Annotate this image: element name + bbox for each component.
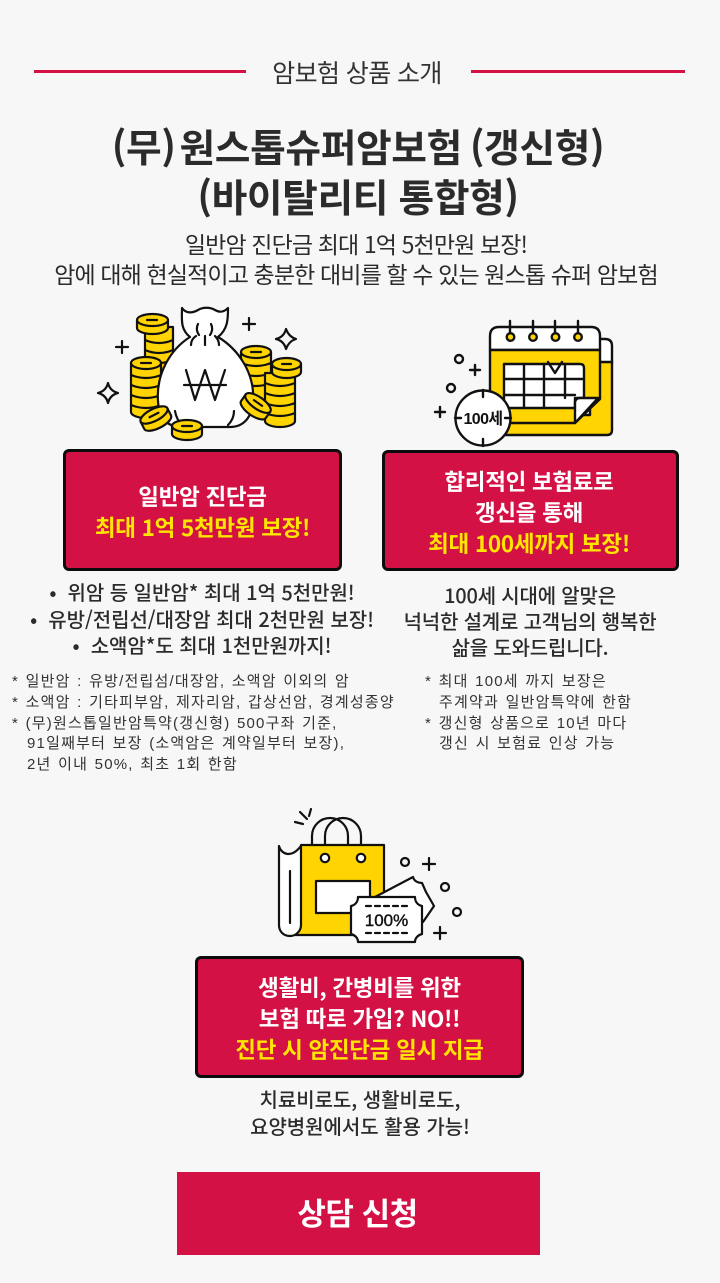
closing text: 요양병원에서도 활용 가능! — [250, 1111, 470, 1140]
title: (무)원스톱슈퍼암보험(갱신형) — [112, 118, 604, 174]
title: (바이탈리티 통합형) — [197, 168, 519, 224]
title — [112, 118, 604, 224]
footnotes left: * (무)원스톱일반암특약(갱신형) 500구좌 기준, — [12, 715, 338, 732]
footnotes left: 91일째부터 보장 (소액암은 계약일부터 보장), — [27, 735, 345, 752]
callout: renewal to age 100: 갱신을 통해 — [475, 496, 583, 528]
icon: calendar with 100 years clock — [434, 320, 614, 448]
coverage list: • 소액암*도 최대 1천만원까지! — [73, 630, 331, 659]
callout: lump sum payment: 생활비, 간병비를 위한 — [258, 971, 461, 1003]
age 100 description: 100세 시대에 알맞은 — [444, 580, 616, 609]
footnotes left — [12, 673, 395, 773]
coverage list — [30, 577, 374, 659]
coverage list: • 위암 등 일반암* 최대 1억 5천만원! — [49, 577, 355, 606]
footnotes right — [425, 673, 632, 752]
age 100 description: 삶을 도와드립니다. — [452, 632, 608, 661]
footnotes right: * 갱신형 상품으로 10년 마다 — [425, 715, 627, 732]
button: consultation request: 상담 신청 — [297, 1189, 418, 1234]
section heading: 암보험 상품 소개 — [272, 54, 442, 90]
closing text — [250, 1084, 470, 1140]
section heading — [34, 54, 685, 90]
subtitle: 암에 대해 현실적이고 충분한 대비를 할 수 있는 원스톱 슈퍼 암보험 — [54, 256, 658, 290]
callout: renewal to age 100 — [382, 450, 679, 571]
footnotes right: 갱신 시 보험료 인상 가능 — [439, 735, 615, 752]
subtitle: 일반암 진단금 최대 1억 5천만원 보장! — [185, 226, 527, 260]
icon: money bag and coins — [96, 306, 302, 442]
footnotes left: * 일반암 : 유방/전립섬/대장암, 소액암 이외의 암 — [12, 673, 350, 690]
callout: lump sum payment: 진단 시 암진단금 일시 지급 — [235, 1033, 484, 1065]
footnotes right: 주계약과 일반암특약에 한함 — [439, 694, 632, 711]
icon: shopping bag and tickets — [278, 808, 462, 944]
age 100 description — [404, 580, 656, 661]
icon: calendar with 100 years clock: 100세 — [463, 410, 503, 428]
footnotes left: * 소액암 : 기타피부암, 제자리암, 갑상선암, 경계성종양 — [12, 694, 395, 711]
coverage list: • 유방/전립선/대장암 최대 2천만원 보장! — [30, 604, 374, 632]
callout: lump sum payment: 보험 따로 가입? NO!! — [259, 1002, 460, 1034]
callout: renewal to age 100: 합리적인 보험료로 — [444, 465, 614, 497]
callout: lump sum payment — [195, 956, 524, 1078]
button: consultation request — [177, 1172, 540, 1255]
age 100 description: 넉넉한 설계로 고객님의 행복한 — [404, 606, 656, 635]
icon: shopping bag and tickets: 100% — [365, 911, 408, 930]
footnotes left: 2년 이내 50%, 최초 1회 한함 — [27, 756, 238, 773]
callout: renewal to age 100: 최대 100세까지 보장! — [428, 527, 630, 559]
callout: general cancer diagnosis: 일반암 진단금 — [138, 480, 267, 512]
callout: general cancer diagnosis: 최대 1억 5천만원 보장! — [95, 511, 310, 543]
subtitle — [54, 226, 658, 290]
footnotes right: * 최대 100세 까지 보장은 — [425, 673, 607, 690]
closing text: 치료비로도, 생활비로도, — [260, 1084, 460, 1113]
callout: general cancer diagnosis — [63, 449, 342, 571]
